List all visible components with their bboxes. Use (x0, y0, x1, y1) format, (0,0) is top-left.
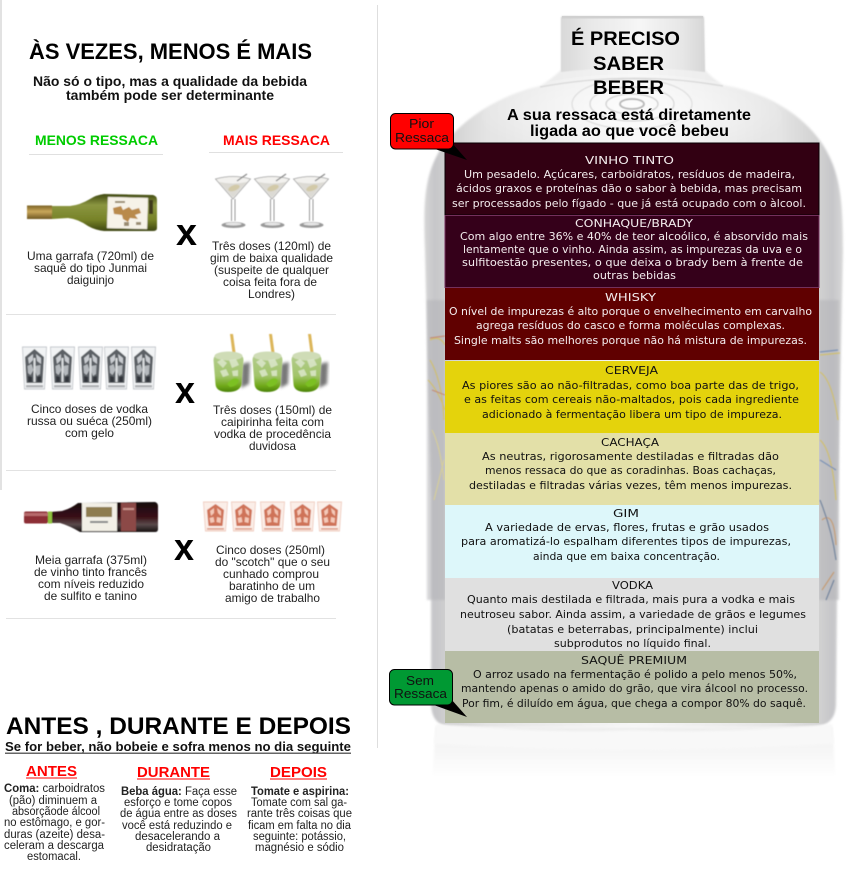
text: gim (210, 239, 333, 301)
panel: vinho tinto (445, 143, 819, 215)
text: caipirinha: Três doses (150ml) de (213, 403, 332, 417)
column: antes: ANTES (26, 763, 77, 780)
panel: whisky: O nível de impurezas é alto porque o envelhecimento em carvalho (449, 305, 812, 318)
icon: red wine bottle (24, 502, 158, 532)
subheading: a sua ressaca: A sua ressaca está diretamente (507, 107, 751, 124)
text: gim: Três doses (120ml) de (212, 239, 331, 253)
text: scotch (215, 543, 330, 605)
comparison row 1: saquê vs gim (27, 174, 333, 301)
text: vinho: Meia garrafa (375ml) (35, 553, 147, 567)
panel: cachaça: menos ressaca do que as coradinhas. Boas cachaças, (485, 464, 776, 477)
text: gim: (suspeite de qualquer (214, 263, 329, 277)
panel: vinho tinto: Um pesadelo. Açúcares, carboidratos, resíduos de madeira, (464, 168, 795, 181)
panel: conhaque/brady: sulfitoestão presentes, o que deixa o brady bem à frente de (462, 256, 803, 269)
column: depois: Tomate com sal ga- (251, 797, 347, 809)
icon: three martini glasses (216, 174, 328, 228)
panel: saquê premium: Por fim, é diluído em água, que chega a compor 80% do saquê. (462, 697, 806, 710)
panel: cachaça (445, 433, 819, 505)
column: durante: você está reduzindo e (122, 820, 232, 832)
column header: menos ressaca: MENOS RESSACA (35, 132, 158, 148)
text: saquê: Uma garrafa (720ml) de (27, 249, 154, 263)
column: durante: Beba água: Faça esse (121, 786, 237, 798)
panel: cachaça: As neutras, rigorosamente destiladas e filtradas dão (482, 450, 779, 463)
panel: whisky: WHISKY (605, 291, 656, 304)
panel: saquê premium: O arroz usado na fermentação é polido a pelo menos 50%, (473, 668, 797, 681)
text: vinho: com níveis reduzido (38, 577, 144, 591)
column: depois: seguinte: potássio, (253, 831, 346, 843)
callout: pior ressaca: Pior (409, 116, 435, 131)
text: vodka (27, 402, 152, 440)
column: durante (120, 764, 237, 854)
column: durante: de água entre as doses (120, 808, 237, 820)
text: saquê: saquê do tipo Junmai (34, 261, 147, 275)
text: vinho (34, 553, 147, 603)
shoulder highlight (482, 74, 782, 162)
panel: vinho tinto: ácidos graxos e proteínas dão o sabor à bebida, mas precisam (456, 182, 802, 195)
subheading: a sua ressaca: ligada ao que você bebeu (530, 123, 729, 140)
column header: mais ressaca: MAIS RESSACA (223, 132, 330, 148)
panel: vodka: subprodutos no líquido final. (554, 637, 711, 650)
shoulder ripples (540, 78, 723, 129)
bottle reflection (432, 727, 836, 778)
panel: vodka: (batatas e beterrabas, principalmente) inclui (507, 623, 758, 636)
panel: cerveja: As piores são ao não-filtradas, como boa parte das de trigo, (462, 379, 799, 392)
x mark: x (176, 212, 197, 254)
text: scotch: do "scotch" que o seu (215, 555, 330, 569)
column: antes (4, 763, 105, 863)
column: antes: no estômago, e gor- (4, 817, 105, 829)
icon: three caipirinhas (214, 334, 328, 392)
text: gim: gim de baixa qualidade (210, 251, 333, 265)
column: durante: desidratação (146, 842, 211, 854)
column: depois: DEPOIS (270, 764, 327, 781)
icon: five vodka glasses (22, 347, 156, 389)
x mark: x (174, 527, 194, 569)
panel: vodka: VODKA (612, 579, 653, 592)
subheading: qualidade da bebida: também pode ser determinante (66, 87, 274, 103)
bottle neck (561, 16, 705, 72)
text: scotch: amigo de trabalho (225, 591, 320, 605)
panel: cachaça: destiladas e filtradas várias vezes, têm menos impurezas. (469, 479, 792, 492)
subheading: qualidade da bebida (33, 73, 307, 103)
illustration: glass bottle (424, 16, 843, 778)
callout: sem ressaca: Ressaca (394, 686, 448, 701)
column: depois: Tomate e aspirina: (251, 786, 349, 798)
panel: gim: GIM (613, 507, 639, 520)
panel: gim (445, 505, 819, 578)
column: durante: desacelerando a (135, 831, 221, 843)
column: antes: Coma: carboidratos (4, 783, 105, 795)
text: gim: coisa feita fora de (223, 275, 317, 289)
text: scotch: baratinho de um (229, 579, 315, 593)
callout: pior ressaca: Ressaca (395, 130, 450, 145)
text: vodka: com gelo (65, 426, 114, 440)
panel: vodka: neutroseu sabor. Ainda assim, a variedade de grãos e legumes (460, 608, 806, 621)
text: vodka: russa ou suéca (250ml) (27, 414, 152, 428)
panel: gim: ainda que em baixa concentração. (533, 550, 720, 563)
subheading: se for beber: Se for beber, não bobeie e sofra menos no dia seguinte (5, 739, 351, 754)
heading: é preciso saber beber: BEBER (593, 77, 664, 99)
column header: mais ressaca (209, 132, 343, 153)
text: caipirinha: vodka de procedência (214, 427, 331, 441)
panel: cerveja: adicionado à fermentação libera um tipo de impureza. (482, 408, 782, 421)
column: depois (247, 764, 352, 854)
bottle base glass (434, 724, 834, 750)
bottle body (424, 16, 843, 727)
heading: às vezes, menos é mais: ÀS VEZES, MENOS É MAIS (29, 39, 312, 64)
panel: conhaque/brady: CONHAQUE/BRADY (575, 217, 693, 230)
heading: é preciso saber beber (571, 27, 680, 99)
text: saquê (27, 249, 154, 287)
panel: cerveja: e as feitas com cereais não-maltados, pois cada ingrediente (464, 393, 799, 406)
panel: conhaque/brady: Com algo entre 36% e 40% de teor alcoólico, é absorvido mais (460, 230, 808, 243)
column header: menos ressaca (29, 132, 163, 155)
callout: sem ressaca (390, 670, 467, 717)
lower side shading (427, 300, 839, 600)
column: antes: celeram a descarga (4, 840, 105, 852)
heading: antes, durante e depois: ANTES , DURANTE E DEPOIS (6, 713, 351, 740)
text: gim: Londres) (248, 287, 295, 301)
column: depois: ficam em falta no dia (248, 820, 352, 832)
column: antes: (pão) diminuem a (9, 795, 98, 807)
panel: whisky (445, 288, 819, 360)
column: depois: magnésio e sódio (255, 842, 344, 854)
text: caipirinha: duvidosa (249, 439, 296, 453)
comparison row 3: vinho vs scotch (24, 502, 342, 605)
column: antes: duras (azeite) desa- (4, 829, 105, 841)
panel: vinho tinto: ser processados pelo fígado - que já está ocupado com o àlcool. (452, 197, 806, 210)
column: durante: esforço e tome copos (124, 797, 232, 809)
heading: é preciso saber beber: SABER (593, 53, 664, 75)
column: durante: DURANTE (137, 764, 210, 781)
panel: saquê premium: mantendo apenas o amido do grão, que vira álcool no processo. (461, 682, 808, 695)
text: scotch: cunhado comprou (223, 567, 319, 581)
callout: sem ressaca: Sem (406, 673, 434, 688)
text: vinho: de sulfito e tanino (44, 589, 137, 603)
text: vodka: Cinco doses de vodka (31, 402, 148, 416)
panel: conhaque/brady: outras bebidas (593, 269, 676, 282)
panel: vodka: Quanto mais destilada e filtrada, mais pura a vodka e mais (467, 593, 795, 606)
text: caipirinha: caipirinha feita com (221, 415, 324, 429)
heading: é preciso saber beber: É PRECISO (571, 27, 680, 50)
panel: cerveja (445, 361, 819, 433)
panel: whisky: Single malts são melhores porque não há mistura de impurezas. (454, 334, 807, 347)
panel: saquê premium (445, 651, 819, 723)
panel: cachaça: CACHAÇA (601, 436, 659, 449)
panel: vodka (445, 578, 819, 651)
comparison row 2: vodka vs caipirinha (22, 334, 332, 453)
column: antes: absorçãode álcool (12, 806, 100, 818)
callout: pior ressaca (390, 114, 467, 160)
panel: saquê premium: SAQUÊ PREMIUM (581, 654, 687, 667)
text: caipirinha (213, 403, 332, 453)
panel: gim: para aromatizá-lo espalham diferentes tipos de impurezas, (461, 535, 791, 548)
coloured label threads (428, 336, 840, 600)
panel: vinho tinto: VINHO TINTO (585, 154, 674, 167)
icon: sake bottle (27, 194, 157, 231)
subheading: a sua ressaca (507, 107, 751, 140)
column: antes: estomacal. (27, 851, 81, 863)
icon: five scotch glasses (204, 502, 342, 531)
text: saquê: daiguinjo (67, 273, 114, 287)
text: vinho: de vinho tinto francês (34, 565, 147, 579)
panel: cerveja: CERVEJA (605, 364, 659, 377)
page edge rules (0, 0, 378, 748)
panel: gim: A variedade de ervas, flores, frutas e grão usados (485, 521, 769, 534)
x mark: x (175, 370, 195, 412)
panel: conhaque/brady (445, 216, 819, 288)
column: depois: rante três coisas que (247, 808, 352, 820)
subheading: qualidade da bebida: Não só o tipo, mas a qualidade da bebida (33, 73, 307, 89)
panel: whisky: agrega resíduos do casco e forma moléculas complexas. (476, 319, 785, 332)
panel: conhaque/brady: lentamente que o vinho. Ainda assim, as impurezas da uva e o (463, 243, 802, 256)
text: scotch: Cinco doses (250ml) (216, 543, 325, 557)
